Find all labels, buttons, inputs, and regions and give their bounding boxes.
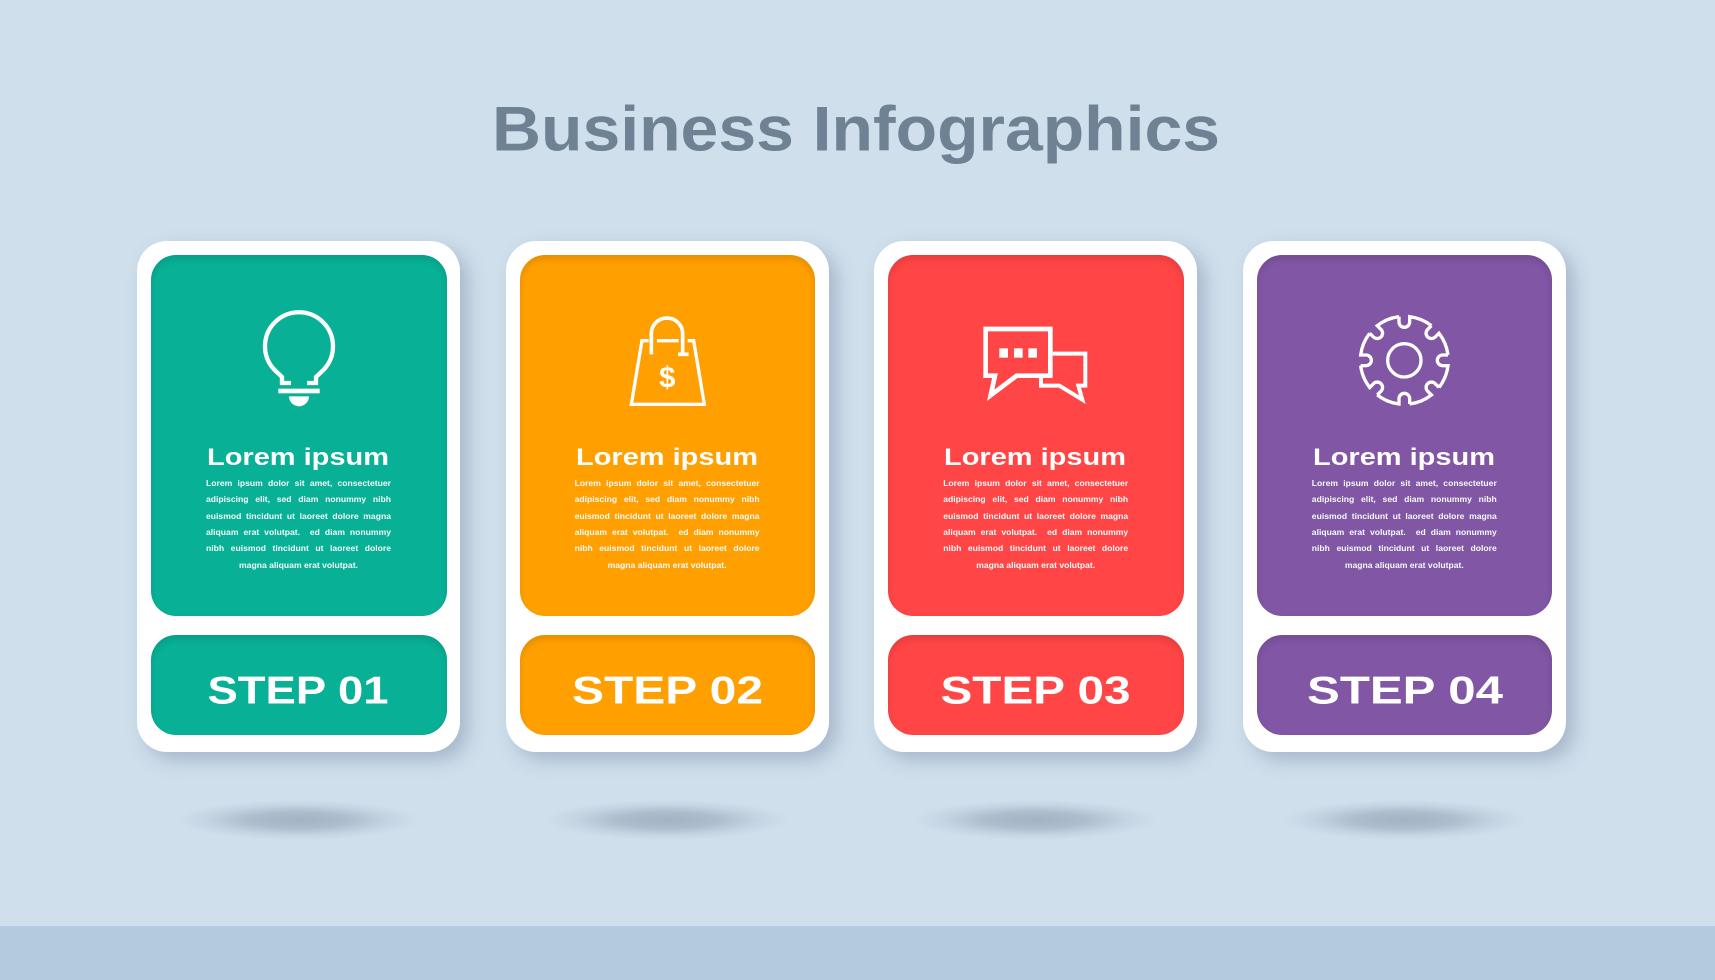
panel: step 04 card — [1243, 241, 1566, 752]
body text: euismod tincidunt ut laoreet dolore magna — [943, 511, 1128, 521]
step label bar — [520, 635, 815, 735]
body text: Lorem ipsum dolor sit amet, consectetuer — [206, 478, 391, 488]
body text: Lorem ipsum dolor sit amet, consectetuer — [943, 478, 1128, 488]
body text: aliquam erat volutpat. ed diam nonummy — [1312, 527, 1497, 537]
body text — [574, 478, 760, 570]
floor shadow: step 03 — [913, 800, 1157, 840]
body text: euismod tincidunt ut laoreet dolore magna — [1312, 511, 1497, 521]
body text: nibh euismod tincidunt ut laoreet dolore — [1312, 543, 1497, 553]
floor shadow: step 02 — [545, 800, 789, 840]
body text: nibh euismod tincidunt ut laoreet dolore — [206, 543, 391, 553]
step label bar — [1257, 635, 1552, 735]
heading: Lorem ipsum — [944, 444, 1126, 471]
body text: aliquam erat volutpat. ed diam nonummy — [575, 527, 760, 537]
body text: adipiscing elit, sed diam nonummy nibh — [943, 494, 1128, 504]
step label: STEP 01 — [208, 670, 388, 712]
heading: Lorem ipsum — [207, 444, 389, 471]
body text — [206, 478, 392, 570]
body text: magna aliquam erat volutpat. — [239, 560, 358, 570]
body text: magna aliquam erat volutpat. — [976, 560, 1095, 570]
icon: light bulb — [262, 310, 336, 406]
panel: step 03 card — [874, 241, 1197, 752]
title: Business Infographics — [492, 95, 1220, 165]
body text — [1312, 478, 1497, 570]
step label bar — [151, 635, 446, 735]
footer band — [0, 926, 1715, 980]
body text: adipiscing elit, sed diam nonummy nibh — [1312, 494, 1497, 504]
step label: STEP 04 — [1307, 670, 1503, 712]
icon: shopping bag — [629, 316, 706, 406]
body text: nibh euismod tincidunt ut laoreet dolore — [943, 543, 1128, 553]
panel: step 01 card — [137, 241, 460, 752]
body text: adipiscing elit, sed diam nonummy nibh — [206, 494, 391, 504]
icon: gear — [1358, 314, 1450, 406]
body text: magna aliquam erat volutpat. — [608, 560, 727, 570]
teal content panel — [151, 255, 446, 616]
floor shadow: step 04 — [1282, 800, 1526, 840]
body text: euismod tincidunt ut laoreet dolore magna — [206, 511, 391, 521]
body text: euismod tincidunt ut laoreet dolore magna — [575, 511, 760, 521]
panel: step 02 card — [506, 241, 829, 752]
red content panel — [888, 255, 1184, 616]
body text: aliquam erat volutpat. ed diam nonummy — [206, 527, 391, 537]
heading: Lorem ipsum — [1313, 444, 1495, 471]
body text — [943, 478, 1128, 570]
body text: nibh euismod tincidunt ut laoreet dolore — [575, 543, 760, 553]
floor shadow: step 01 — [176, 800, 420, 840]
body text: aliquam erat volutpat. ed diam nonummy — [943, 527, 1128, 537]
step label bar — [888, 635, 1184, 735]
icon: shopping bag: $ — [659, 361, 675, 394]
body text: Lorem ipsum dolor sit amet, consectetuer — [575, 478, 760, 488]
icon: chat bubbles — [983, 326, 1088, 404]
step label: STEP 03 — [941, 670, 1131, 712]
orange content panel — [520, 255, 815, 616]
body text: magna aliquam erat volutpat. — [1345, 560, 1464, 570]
body text: adipiscing elit, sed diam nonummy nibh — [575, 494, 760, 504]
body text: Lorem ipsum dolor sit amet, consectetuer — [1312, 478, 1497, 488]
step label: STEP 02 — [572, 670, 763, 712]
heading: Lorem ipsum — [576, 444, 758, 471]
purple content panel — [1257, 255, 1552, 616]
